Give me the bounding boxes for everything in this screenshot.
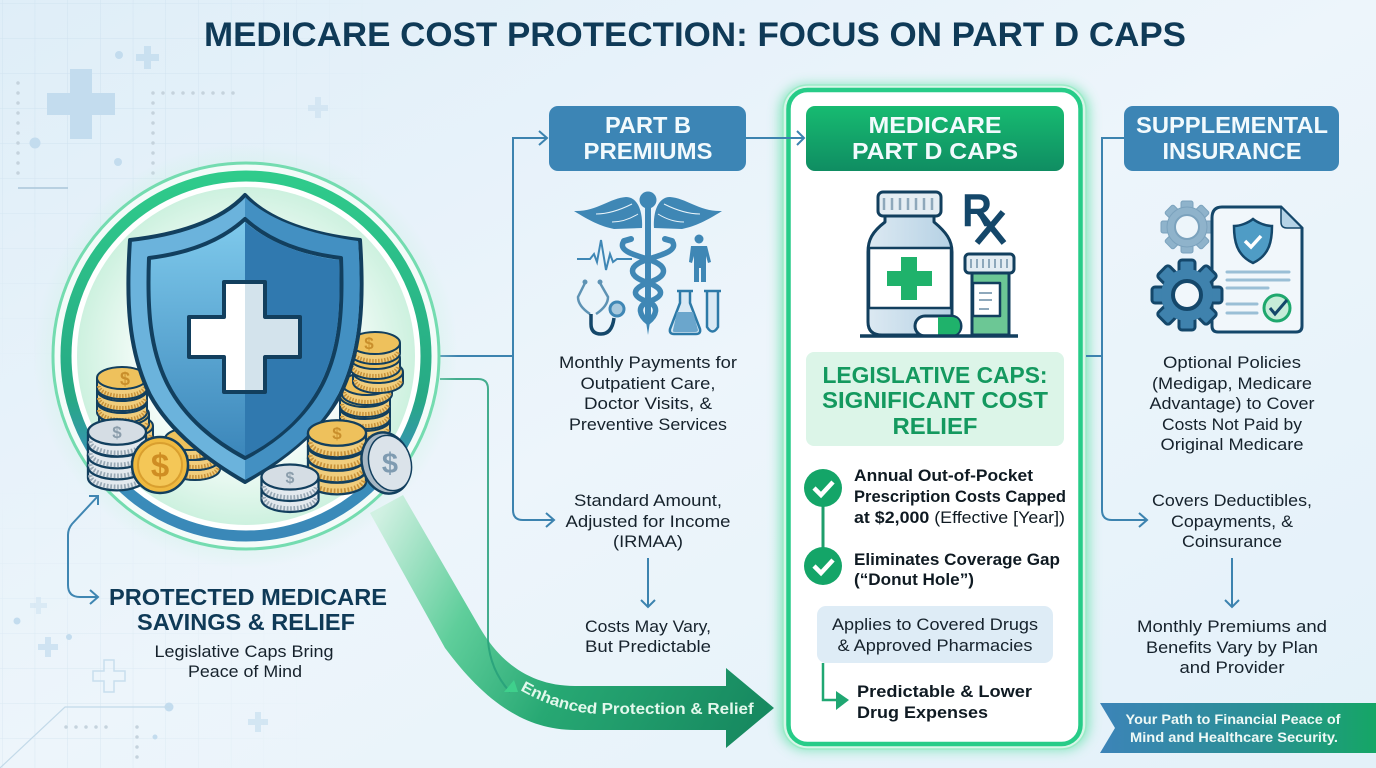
text: costs may vary: But Predictable <box>585 637 711 656</box>
text: protected savings: SAVINGS & RELIEF <box>137 609 355 635</box>
arrow: connector from circle to Part B <box>440 131 554 527</box>
text: coverage gap: (“Donut Hole”) <box>854 570 974 589</box>
text: costs may vary <box>585 617 711 656</box>
text: standard amount: Standard Amount, <box>574 491 722 510</box>
coins in front of shield: $ <box>151 447 169 484</box>
text: predictable expenses <box>857 682 1032 722</box>
text: monthly premiums: Monthly Premiums and <box>1137 617 1327 636</box>
heading: PART D CAPS <box>852 138 1018 164</box>
icon: protected savings emblem <box>34 144 458 568</box>
coins in front of shield: $ <box>382 448 398 480</box>
text: monthly payments: Monthly Payments for <box>559 353 737 372</box>
text: annual cap: at $2,000 (Effective [Year]) <box>854 508 1065 527</box>
text: optional policies <box>1150 353 1315 454</box>
text: covers deductibles <box>1152 491 1312 551</box>
text: coverage gap: Eliminates Coverage Gap <box>854 550 1060 569</box>
text: protected savings: Legislative Caps Bring <box>154 642 334 661</box>
connector lines <box>1086 138 1147 527</box>
heading <box>806 106 1064 171</box>
text: protected savings: PROTECTED MEDICARE <box>109 584 387 610</box>
text: optional policies: Optional Policies <box>1163 353 1301 372</box>
panel: Part B premiums <box>549 106 746 656</box>
callout: applies to covered drugs: Applies to Covered Drugs <box>832 615 1038 634</box>
arrow: loop to protected savings label <box>68 496 98 604</box>
text: optional policies: (Medigap, Medicare <box>1152 374 1312 393</box>
panel: Medicare Part D caps <box>746 85 1089 750</box>
background <box>0 0 354 768</box>
icon: policy document and gears <box>1152 201 1302 332</box>
callout: legislative caps: LEGISLATIVE CAPS: <box>822 362 1048 388</box>
callout: applies to covered drugs <box>817 606 1053 663</box>
icon: prescription bottles: R <box>962 184 992 236</box>
text: standard amount: (IRMAA) <box>613 532 683 551</box>
heading: SUPPLEMENTAL <box>1136 112 1328 138</box>
panel frame <box>780 85 1089 750</box>
text: coverage gap <box>854 550 1060 589</box>
panel: supplemental insurance <box>1086 106 1339 677</box>
coins in front of shield <box>88 419 418 512</box>
arrow: down <box>641 558 655 607</box>
text: monthly premiums: and Provider <box>1180 658 1285 677</box>
arrow: enhanced protection ribbon <box>370 495 774 748</box>
icon: check marks <box>804 469 842 585</box>
text: standard amount: Adjusted for Income <box>566 512 730 531</box>
icon: prescription bottles <box>860 184 1018 336</box>
arrow: green connector into ribbon <box>440 379 518 692</box>
callout: legislative caps <box>806 352 1064 446</box>
text: annual cap: Prescription Costs Capped <box>854 487 1066 506</box>
heading: PART B <box>605 112 691 138</box>
coins in front of shield: $ <box>112 423 122 442</box>
icon: caduceus and medical tools <box>574 192 722 335</box>
text: monthly payments: Outpatient Care, <box>580 374 716 393</box>
heading: INSURANCE <box>1162 138 1302 164</box>
callout: applies to covered drugs: & Approved Pharmacies <box>838 636 1032 655</box>
text: monthly payments: Preventive Services <box>569 415 727 434</box>
circle ring <box>34 144 458 568</box>
callout: legislative caps: SIGNIFICANT COST <box>822 387 1049 413</box>
arrow: to predictable expenses <box>823 663 849 710</box>
text: monthly premiums <box>1137 617 1327 677</box>
text: protected savings: Peace of Mind <box>188 662 302 681</box>
coin stacks behind shield <box>97 332 403 480</box>
callout: legislative caps: RELIEF <box>892 413 978 439</box>
text: covers deductibles: Copayments, & <box>1171 512 1294 531</box>
title: MEDICARE COST PROTECTION: FOCUS ON PART D CAPS <box>204 16 1186 54</box>
heading: PREMIUMS <box>584 138 712 164</box>
text: covers deductibles: Covers Deductibles, <box>1152 491 1312 510</box>
text: standard amount <box>566 491 730 551</box>
arrow: Part B to Part D <box>746 131 804 145</box>
text: covers deductibles: Coinsurance <box>1182 532 1282 551</box>
text: annual cap: Annual Out-of-Pocket <box>854 466 1033 485</box>
text: optional policies: Original Medicare <box>1160 435 1304 454</box>
coin stacks behind shield: $ <box>364 334 374 353</box>
text: predictable expenses: Predictable & Lower <box>857 682 1032 701</box>
coins in front of shield: $ <box>286 470 295 487</box>
text: monthly premiums: Benefits Vary by Plan <box>1146 638 1318 657</box>
coins in front of shield: $ <box>332 424 342 443</box>
coin stacks behind shield: $ <box>120 369 130 389</box>
banner: closing message <box>1100 703 1376 753</box>
text: protected savings <box>109 584 387 681</box>
text: costs may vary: Costs May Vary, <box>585 617 711 636</box>
text: optional policies: Advantage) to Cover <box>1150 394 1315 413</box>
heading <box>1124 106 1339 171</box>
ribbon label: Enhanced Protection & Relief <box>521 681 754 714</box>
text: optional policies: Costs Not Paid by <box>1162 415 1303 434</box>
banner: closing message: Mind and Healthcare Security. <box>1130 729 1338 745</box>
icon: shield <box>128 195 362 482</box>
text: predictable expenses: Drug Expenses <box>857 703 988 722</box>
text: annual cap <box>854 466 1066 527</box>
heading: MEDICARE <box>868 112 1002 138</box>
text: monthly payments <box>559 353 737 434</box>
arrow: down <box>1225 558 1239 607</box>
text: monthly payments: Doctor Visits, & <box>584 394 713 413</box>
banner: closing message: Your Path to Financial Peace of <box>1126 711 1341 727</box>
heading <box>549 106 746 171</box>
